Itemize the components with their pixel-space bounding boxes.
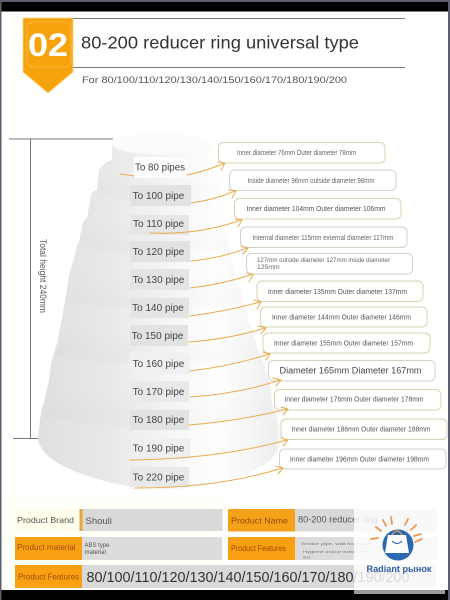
label: to 110: To 110 pipe (133, 219, 184, 230)
label: to 110 (130, 215, 189, 235)
watermark (354, 507, 445, 594)
label: to 190 (130, 439, 190, 459)
callout 12: Inner diameter 196mm Outer diameter 198mm (290, 454, 429, 464)
label: to 190: To 190 pipe (133, 444, 185, 454)
row: sizes: 80/100/110/120/130/140/150/160/170/180/190/200 (86, 570, 410, 586)
label: to 80 (134, 157, 189, 178)
row: product material (15, 537, 222, 560)
callout 10 (274, 390, 441, 410)
title: 80-200 reducer ring universal type (81, 32, 359, 52)
callout 9: Diameter 165mm Diameter 167mm (280, 366, 422, 376)
watermark name: Radiant рынок (366, 564, 432, 574)
label: to 150 (130, 325, 188, 346)
row: sizes (15, 565, 436, 588)
icon: shopping bag sun (371, 517, 422, 560)
row: product name: Product Name (231, 516, 288, 526)
callout 6 (257, 281, 423, 302)
row: product features: duct (303, 554, 311, 560)
label: to 100: To 100 pipe (133, 191, 185, 202)
product table (15, 509, 437, 588)
row: product material: Product material (17, 543, 76, 552)
row: product name (228, 509, 437, 532)
row: product material: material (84, 550, 106, 556)
callout 11: Inner diameter 186mm Outer diameter 188mm (292, 424, 430, 434)
cone body (38, 143, 281, 489)
callout 2 (230, 170, 396, 190)
callout 5: 125mm (257, 264, 280, 271)
callout 12 (280, 449, 446, 469)
label: to 130: To 130 pipe (133, 275, 185, 286)
callout 9 (268, 360, 435, 381)
callouts (218, 142, 447, 469)
label: to 140: To 140 pipe (132, 303, 184, 314)
badge 02: 02 (28, 27, 68, 63)
total height label: Total height 240mm (38, 239, 48, 313)
label: to 180 (130, 410, 189, 430)
callout 3: Inner diameter 104mm Outer diameter 106mm (246, 204, 386, 213)
label: to 130 (130, 269, 189, 290)
callout 5: 127mm outside diameter 127mm inside diameter (257, 257, 391, 264)
callout 10: Inner diameter 176mm Outer diameter 178mm (284, 394, 424, 404)
label: to 80: To 80 pipes (135, 162, 185, 174)
callout 3 (234, 198, 401, 219)
row: product features: Hygiene indoor exhaust (303, 549, 364, 554)
subtitle: For 80/100/110/120/130/140/150/160/170/180/190/200 (82, 75, 347, 86)
ring shading (42, 170, 270, 428)
callout 6: Inner diameter 135mm Outer diameter 137mm (268, 287, 407, 296)
label: to 220: To 220 pipe (133, 472, 185, 484)
callout 11 (281, 419, 447, 440)
row: product features: Smoke pipe, wall hole duct (301, 541, 372, 546)
badge 02 (23, 18, 73, 93)
label: to 170 (130, 381, 189, 402)
row: sizes: Product Features (18, 572, 79, 582)
label: to 150: To 150 pipe (132, 331, 184, 342)
row: product brand (15, 509, 222, 531)
header (23, 18, 405, 93)
label: to 120: To 120 pipe (133, 247, 185, 258)
label: to 180: To 180 pipe (133, 415, 185, 426)
row: product features (228, 537, 437, 560)
row: product material: ABS type (84, 543, 110, 549)
row: product name: 80-200 reducer ring (298, 514, 378, 526)
reducer cone (38, 134, 281, 489)
arrows (120, 162, 288, 488)
callout 4 (240, 227, 407, 248)
row: product brand: Product Brand (17, 515, 74, 525)
label: to 120 (130, 241, 190, 262)
label: to 170: To 170 pipe (133, 387, 185, 398)
top opening (112, 134, 210, 154)
callout 1: Inner diameter 76mm Outer diameter 78mm (237, 148, 356, 157)
watermark panel (354, 507, 445, 594)
callout 7: Inner diameter 144mm Outer diameter 146mm (272, 312, 411, 322)
label: to 220 (130, 467, 189, 487)
pipe labels (130, 157, 191, 487)
label: to 160 (130, 353, 190, 374)
watermark shadow (354, 590, 445, 594)
callout 4: Internal diameter 115mm external diameter 117mm (252, 233, 394, 242)
callout 2: Inside diameter 96mm outside diameter 98mm (248, 176, 375, 185)
callout 8: Inner diameter 155mm Outer diameter 157mm (274, 338, 413, 348)
label: to 160: To 160 pipe (133, 359, 185, 370)
label: to 140 (130, 298, 189, 318)
callout 5 (246, 254, 412, 274)
callout 8 (263, 333, 430, 353)
row: product brand: Shouli (86, 516, 112, 527)
callout 1 (218, 142, 385, 163)
row: product features: Product Features (231, 544, 286, 553)
header rules (73, 18, 405, 68)
callout 7 (260, 307, 427, 327)
label: to 100 (130, 185, 191, 206)
